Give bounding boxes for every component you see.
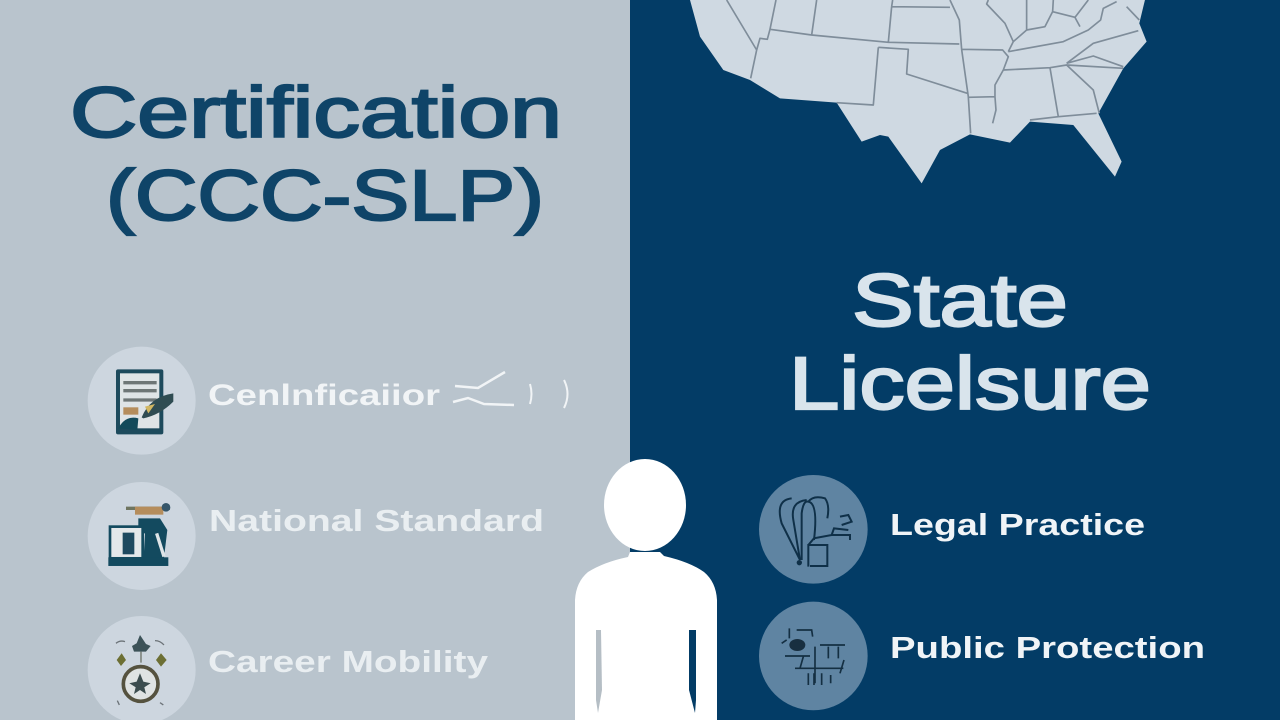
title: State Licensure: State — [852, 259, 1068, 342]
title: State Licensure — [789, 259, 1151, 425]
label: Public Protection: Public Protection — [890, 630, 1205, 665]
label: Certification: Cenlnficaiior — [208, 379, 440, 412]
title: State Licensure: Licelsure — [789, 342, 1151, 425]
map: southern United States — [690, 0, 1147, 183]
icon: career mobility star compass — [88, 616, 196, 720]
label: Career Mobility: Career Mobility — [208, 644, 489, 679]
panel: certification background — [0, 0, 630, 720]
label: Certification — [208, 372, 568, 412]
icon: legal practice balloon — [759, 475, 868, 584]
icon: national standard building — [88, 482, 196, 590]
label: National Standard: National Standard — [209, 503, 544, 538]
title: Certification (CCC-SLP) — [70, 74, 562, 236]
panel: state licensure background — [630, 0, 1280, 720]
label: Legal Practice: Legal Practice — [890, 507, 1145, 542]
title: Certification (CCC-SLP): (CCC-SLP) — [106, 157, 544, 236]
figure: central person silhouette — [575, 459, 717, 720]
icon: certificate document — [88, 347, 196, 455]
title: Certification (CCC-SLP): Certification — [70, 74, 562, 153]
icon: public protection grid — [759, 602, 868, 710]
